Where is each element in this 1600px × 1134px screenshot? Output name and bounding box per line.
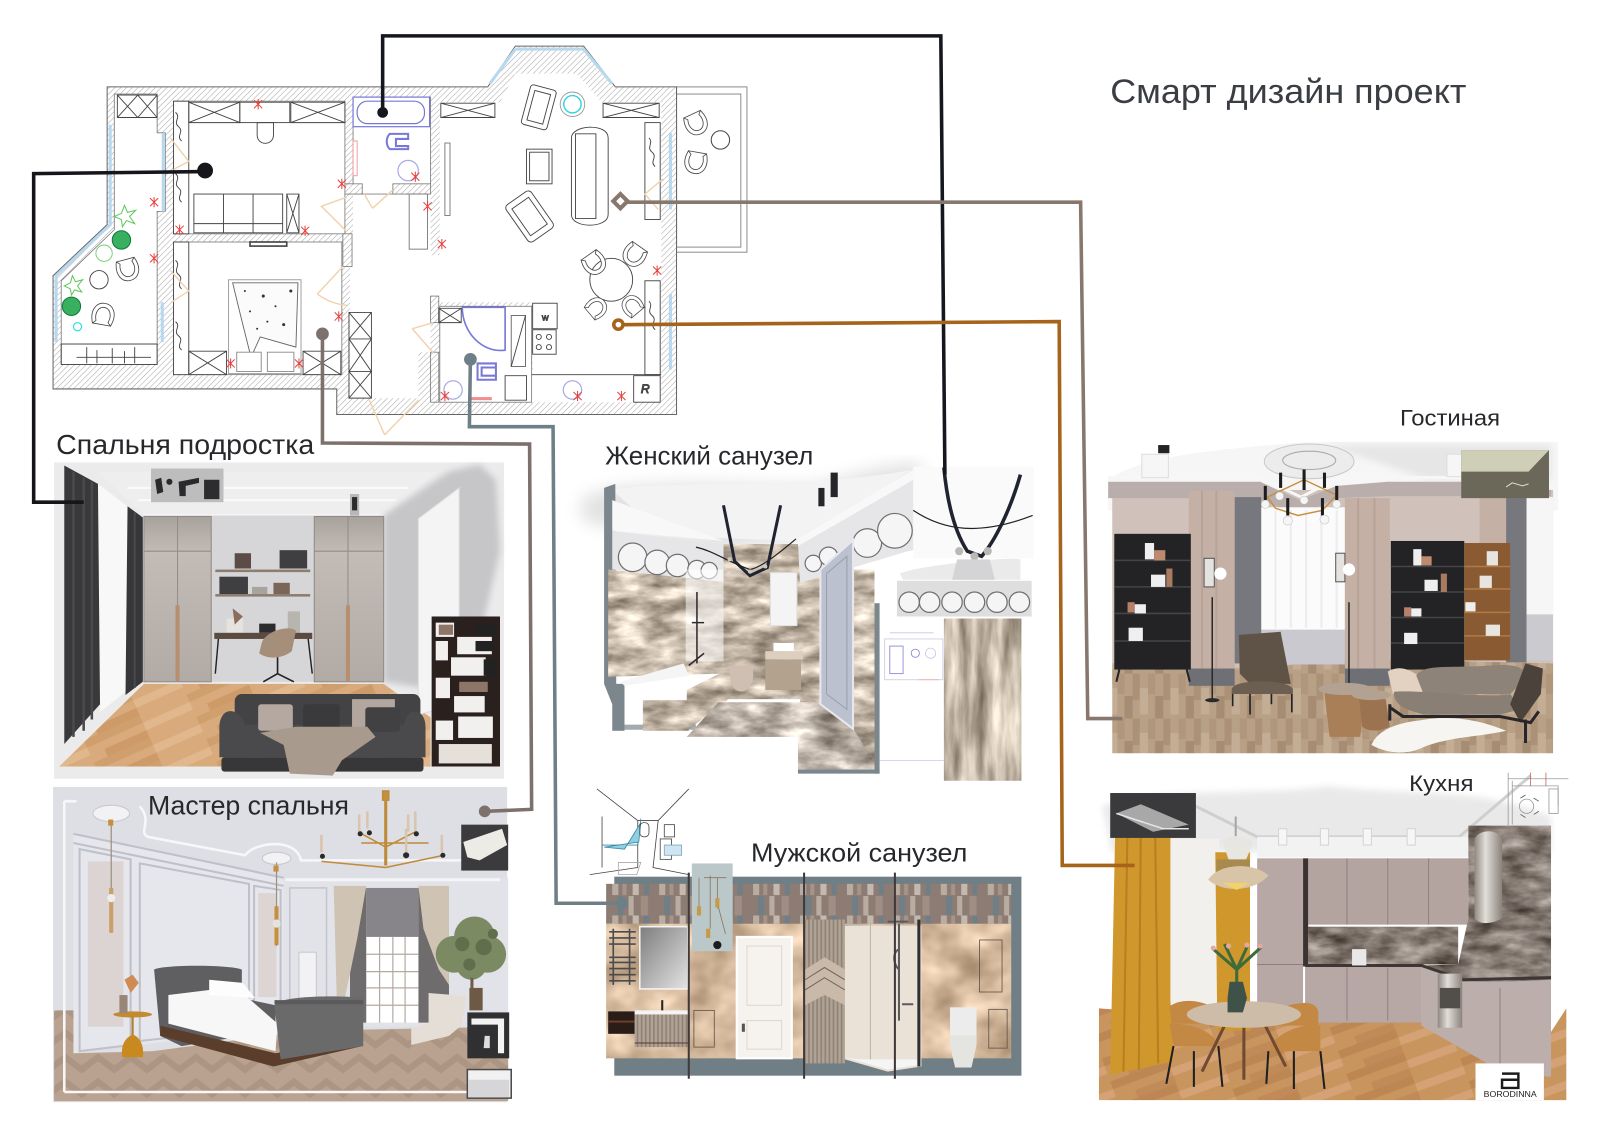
small spotlight [350, 494, 359, 515]
vertical section lines [689, 873, 895, 1079]
spotlights card [151, 469, 223, 502]
cabinets [1257, 826, 1551, 1077]
pendant lamp [1208, 816, 1268, 890]
title: Смарт дизайн проект [1110, 73, 1466, 111]
right wall paint [384, 464, 500, 694]
ceiling spots [1279, 829, 1415, 845]
curtains [64, 465, 143, 744]
window and curtains [334, 886, 449, 1023]
loggia glazing [56, 49, 670, 370]
cornice card [1110, 793, 1196, 838]
plants [62, 205, 136, 331]
pendant [696, 505, 796, 576]
panel: teen bedroom [54, 462, 504, 779]
curtains [1189, 491, 1553, 686]
slate frame [614, 877, 1021, 1076]
mirror and rail [609, 927, 688, 989]
door [820, 540, 853, 729]
sofa [219, 694, 426, 776]
chairs [1166, 1001, 1324, 1089]
floor marble [687, 702, 874, 770]
slate shadow strips [604, 484, 880, 774]
chandelier [320, 791, 445, 868]
label: female bathroom: Женский санузел [605, 442, 813, 470]
balcony right [677, 87, 747, 252]
sheer [1168, 839, 1219, 1014]
label: living room: Гостиная [1400, 406, 1500, 431]
panel: male bathroom [590, 789, 1021, 1079]
ceiling [1108, 442, 1558, 510]
sofa [1388, 663, 1543, 743]
wall [606, 924, 1011, 1058]
lamp card [692, 863, 733, 951]
mini plan [880, 633, 944, 760]
connector: living room [613, 194, 1122, 719]
door [737, 937, 792, 1058]
electrical marks [150, 99, 661, 401]
right detail column [897, 466, 1034, 781]
ceiling wash [1102, 786, 1551, 852]
plant [436, 916, 506, 1010]
label: teen bedroom: Спальня подростка [56, 429, 315, 460]
hatch wall fragments [343, 184, 439, 402]
coffee tables [1318, 683, 1391, 737]
plumbing blue [353, 97, 582, 399]
flowers and vase [1211, 943, 1263, 1012]
ceiling rose [1264, 444, 1354, 479]
logo: BORODINNA [1484, 1090, 1537, 1099]
floor [54, 1010, 508, 1101]
radiator [299, 952, 316, 1003]
marble walls [723, 544, 800, 699]
curtains [1110, 826, 1250, 1075]
toilet [950, 1007, 977, 1068]
shelves and desk [214, 550, 312, 682]
chandelier [1261, 470, 1341, 525]
shower screen and tub [620, 570, 723, 686]
toilet and vanity [729, 573, 803, 691]
striped panel [805, 920, 845, 1063]
friezes [612, 469, 915, 583]
ceiling wash [582, 464, 923, 551]
ceiling mouldings [64, 801, 500, 1092]
bed [154, 966, 363, 1066]
walls [1112, 490, 1553, 684]
sketch [590, 789, 689, 875]
floor plan [53, 46, 747, 435]
label: male bathroom: Мужской санузел [751, 839, 967, 867]
panel: living room [1108, 442, 1558, 753]
connector: male bathroom [466, 355, 627, 907]
ceiling spots [818, 473, 838, 506]
furniture lines: R [641, 382, 650, 396]
door [418, 488, 459, 714]
connector: bathroom to female bathroom [379, 36, 945, 475]
panel: kitchen [1099, 773, 1568, 1100]
walls hatch [53, 46, 677, 414]
logo [1476, 1063, 1544, 1100]
connector: master bedroom [318, 329, 532, 815]
panel: master bedroom [53, 787, 511, 1102]
connector: teen bedroom [34, 164, 211, 502]
spots [1142, 445, 1471, 478]
tile band [606, 884, 1011, 924]
shower [845, 920, 921, 1072]
floor [1099, 1008, 1566, 1100]
moulding cards [461, 825, 508, 871]
floor [1112, 658, 1553, 753]
bookcase [432, 616, 500, 766]
furniture lines [61, 84, 661, 402]
wall niche outlines [694, 940, 1007, 1048]
wardrobes [144, 516, 384, 682]
side table [113, 975, 152, 1057]
furniture lines: W [542, 315, 549, 323]
mini plan [1508, 773, 1568, 826]
black bookcases [1114, 534, 1510, 682]
doors [170, 138, 663, 435]
rug [1371, 718, 1506, 753]
label: master bedroom: Мастер спальня [148, 790, 349, 820]
back wall panels [284, 878, 508, 1027]
label: kitchen: Кухня [1409, 771, 1473, 796]
hood [1474, 831, 1502, 923]
window [1260, 507, 1345, 664]
vanity [608, 1000, 690, 1047]
floor [59, 684, 431, 766]
rooms interior [61, 74, 661, 402]
floor lamps [1204, 553, 1355, 702]
armchair [411, 993, 467, 1045]
dining table [1187, 1001, 1301, 1080]
armchair [1232, 632, 1293, 714]
pendants [93, 805, 291, 946]
finish card [1461, 450, 1549, 498]
panel: female bathroom [582, 464, 1034, 781]
left wall panels [73, 834, 284, 1053]
connector: kitchen [614, 320, 1135, 865]
